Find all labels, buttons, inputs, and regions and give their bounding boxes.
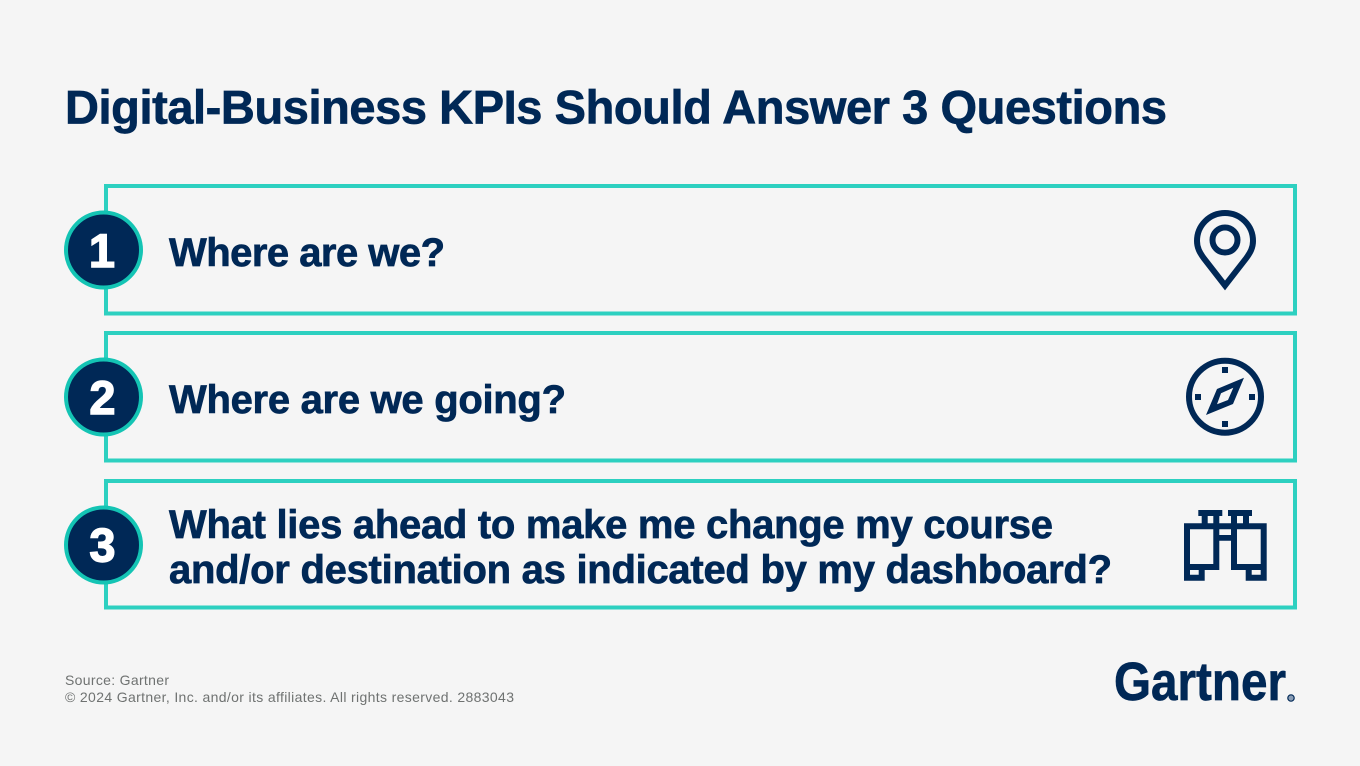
icon: binoculars (1184, 510, 1267, 581)
source and copyright: © 2024 Gartner, Inc. and/or its affiliates. All rights reserved. 2883043 (65, 689, 514, 705)
number badge 3: 3 (89, 518, 116, 572)
panel: question 3 (66, 481, 1295, 608)
title: Digital-Business KPIs Should Answer 3 Questions (65, 80, 1167, 134)
panel: question 1 (66, 186, 1295, 314)
number badge 2 (66, 360, 141, 434)
number badge 3 (66, 508, 141, 582)
question text 3 (169, 503, 1112, 592)
number badge 1 (66, 212, 141, 288)
number badge 1: 1 (89, 224, 115, 277)
panel frame 3 (106, 481, 1295, 608)
question text 3: What lies ahead to make me change my course (169, 503, 1053, 547)
question text 1: Where are we? (169, 231, 445, 275)
icon: map pin (1197, 213, 1253, 286)
question text 3: and/or destination as indicated by my dashboard? (169, 548, 1112, 592)
Gartner logo: Gartner (1114, 652, 1286, 712)
source and copyright (65, 672, 514, 705)
panel: question 2 (66, 333, 1295, 460)
question text 2: Where are we going? (169, 378, 566, 422)
panel frame 1 (106, 186, 1295, 314)
number badge 2: 2 (89, 371, 116, 424)
source and copyright: Source: Gartner (65, 672, 169, 688)
panel frame 2 (106, 333, 1295, 460)
icon: compass (1189, 361, 1261, 433)
